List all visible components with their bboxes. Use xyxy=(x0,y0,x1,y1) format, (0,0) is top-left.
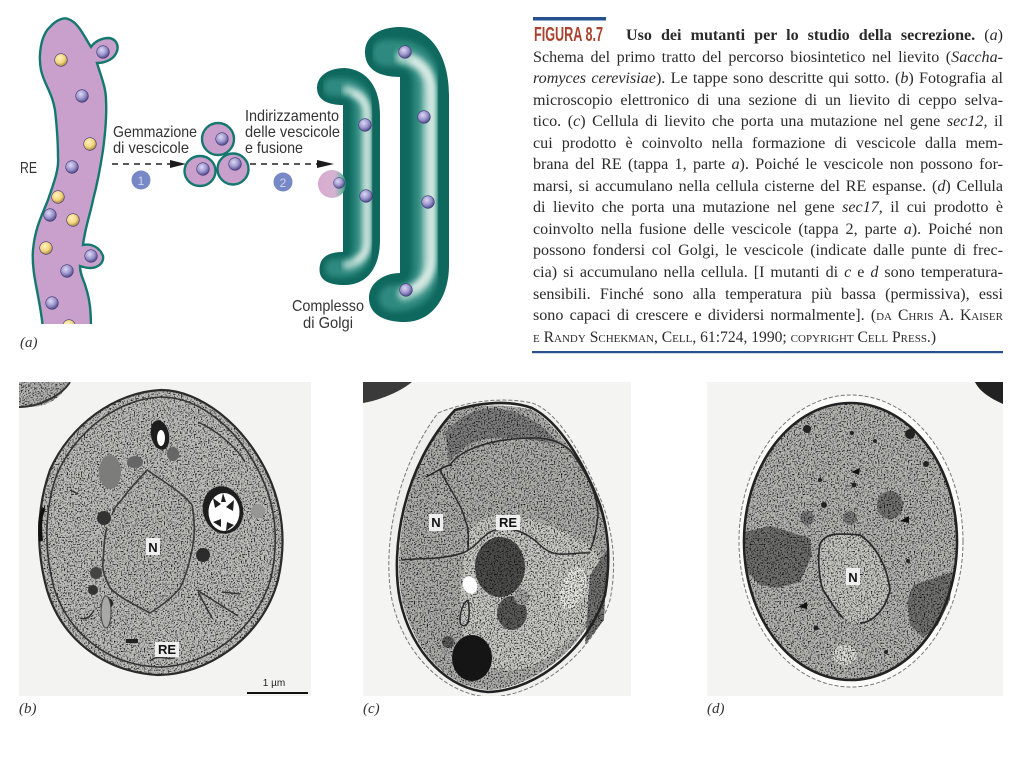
micrograph (c) xyxy=(363,382,631,697)
caption text: Schema del primo tratto del percorso biosintetico nel lievito (Saccha- xyxy=(533,49,1003,66)
figure number: FIGURA 8.7 xyxy=(534,24,603,46)
cargo spheres xyxy=(40,46,109,332)
endoplasmic reticulum xyxy=(33,18,118,332)
label: targeting and fusion: delle vescicole xyxy=(245,124,340,141)
arrow 1 xyxy=(112,160,186,168)
bottom rule xyxy=(532,351,1003,353)
caption text: di lievito che porta una mutazione nel gene sec17, il cui prodotto è xyxy=(533,199,1003,216)
arrow 2 xyxy=(250,160,334,168)
step number 1 xyxy=(132,170,150,190)
panel label (b): (b) xyxy=(19,701,36,717)
caption text: microscopio elettronico di una sezione di un lievito di ceppo selva- xyxy=(533,92,1003,109)
budded vesicles xyxy=(184,123,248,186)
label: N: N xyxy=(431,515,441,530)
step number 2: 2 xyxy=(280,176,287,190)
label: Golgi complex: di Golgi xyxy=(303,315,353,332)
caption text: e Randy Schekman, Cell, 61:724, 1990; copyright Cell Press.) xyxy=(533,329,936,346)
label: N xyxy=(846,568,860,585)
caption text: possono fondersi col Golgi, le vescicole (indicate dalle punte di frec- xyxy=(533,242,1003,259)
panel label (d): (d) xyxy=(707,701,724,717)
step number 1: 1 xyxy=(138,174,145,188)
scale bar: 1 µm xyxy=(263,678,285,689)
label: budding: Gemmazione xyxy=(113,124,197,141)
panel label (c): (c) xyxy=(363,701,380,717)
caption text xyxy=(533,27,1003,346)
label: N xyxy=(429,514,443,531)
fusing vesicle xyxy=(318,170,346,198)
label: N: N xyxy=(848,570,858,585)
caption text: sono capaci di crescere e dividersi normalmente]. (da Chris A. Kaiser xyxy=(533,307,1003,324)
caption text: brana del RE (tappa 1, parte a). Poiché le vescicole non possono for- xyxy=(533,156,1003,173)
panel label (a): (a) xyxy=(20,335,38,351)
label: targeting and fusion xyxy=(245,108,340,157)
caption text: romyces cerevisiae). Le tappe sono descritte qui sotto. (b) Fotografia al xyxy=(533,70,1003,87)
caption text: cui prodotto è coinvolto nella formazione di vescicole dalla mem- xyxy=(533,135,1003,152)
Golgi cisterna, small xyxy=(317,68,380,285)
label: RE: RE xyxy=(158,642,176,657)
label: RE: RE xyxy=(499,515,517,530)
label: targeting and fusion: e fusione xyxy=(245,140,303,157)
micrograph (b) xyxy=(19,382,311,696)
label: targeting and fusion: Indirizzamento xyxy=(245,108,339,125)
Golgi cisterna, large xyxy=(365,27,449,322)
caption text: cia) si accumulano nella cellula. [I mutanti di c e d sono temperatura- xyxy=(533,264,1003,281)
step number 2 xyxy=(274,172,292,192)
figure title rule xyxy=(533,17,606,20)
arrowheads xyxy=(798,468,909,609)
label: budding xyxy=(113,124,197,157)
caption text: sensibili. Finché sono alla temperatura più bassa (permissiva), essi xyxy=(533,286,1003,303)
caption text: marsi, si accumulano nella cellula cisterne del RE espanse. (d) Cellula xyxy=(533,178,1003,195)
scale bar xyxy=(247,678,308,694)
label: Golgi complex: Complesso xyxy=(292,298,364,315)
label: RE: RE xyxy=(20,160,37,177)
caption text: Uso dei mutanti per lo studio della secrezione. (a) xyxy=(626,27,1003,44)
label: N: N xyxy=(148,540,158,555)
micrograph (d) xyxy=(707,382,1003,696)
label: budding: di vescicole xyxy=(113,140,189,157)
Golgi cargo spheres xyxy=(359,46,434,296)
caption text: coinvolto nella fusione delle vescicole (tappa 2, parte a). Poiché non xyxy=(533,221,1003,238)
caption text: tico. (c) Cellula di lievito che porta una mutazione nel gene sec12, il xyxy=(533,113,1003,130)
label: N xyxy=(146,538,160,555)
label: Golgi complex xyxy=(292,298,364,332)
